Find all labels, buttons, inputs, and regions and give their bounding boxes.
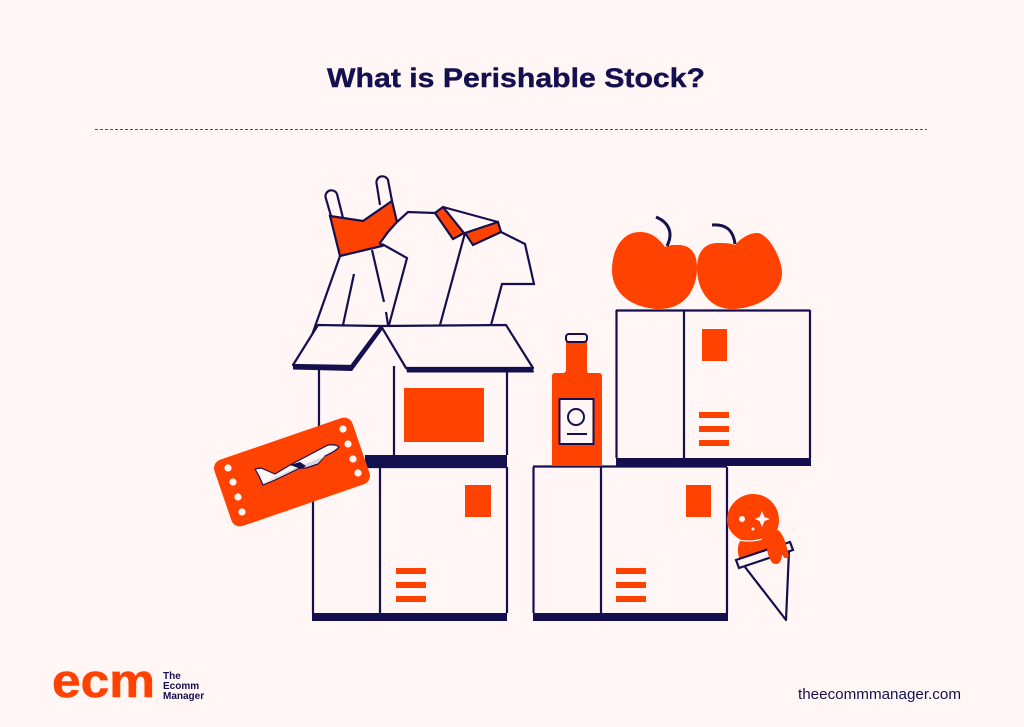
dress bodice [330, 201, 397, 256]
clothing: dress and shirt [312, 176, 534, 335]
left apple [612, 232, 697, 309]
box: bottom left [312, 467, 507, 621]
footer url: theecommmanager.com [798, 686, 961, 703]
logo [52, 654, 204, 707]
shirt body [397, 207, 534, 325]
right flap [406, 368, 534, 372]
box label [404, 388, 484, 442]
dress straps [325, 176, 392, 218]
ice cream scoop [727, 494, 779, 561]
logo wordmark: Manager [163, 691, 204, 702]
ice cream drips [767, 530, 789, 564]
icon: plane ticket [212, 415, 372, 529]
cone [745, 551, 789, 620]
ticket perforations [224, 425, 362, 516]
logo wordmark [163, 671, 204, 702]
box: open top box [293, 325, 534, 467]
bottle cap [566, 334, 587, 342]
box: bottom right [533, 466, 728, 621]
cone rim [736, 542, 793, 568]
box body [319, 366, 507, 455]
right apple [697, 233, 782, 309]
icon: melting ice cream [727, 494, 793, 620]
logo wordmark: Ecomm [163, 681, 199, 692]
title: What is Perishable Stock? [327, 63, 705, 93]
left flap [293, 326, 383, 371]
apple stems [656, 217, 735, 246]
bottle label [560, 399, 594, 444]
face sparkle [755, 511, 770, 527]
airplane [255, 445, 339, 485]
icon: bottle [552, 334, 602, 466]
box: top right [616, 310, 811, 466]
icon: apples [612, 217, 782, 309]
shirt collar [435, 207, 464, 239]
logo wordmark: The [163, 671, 181, 682]
dress skirt [312, 244, 407, 335]
logo mark: ecm [52, 654, 155, 707]
